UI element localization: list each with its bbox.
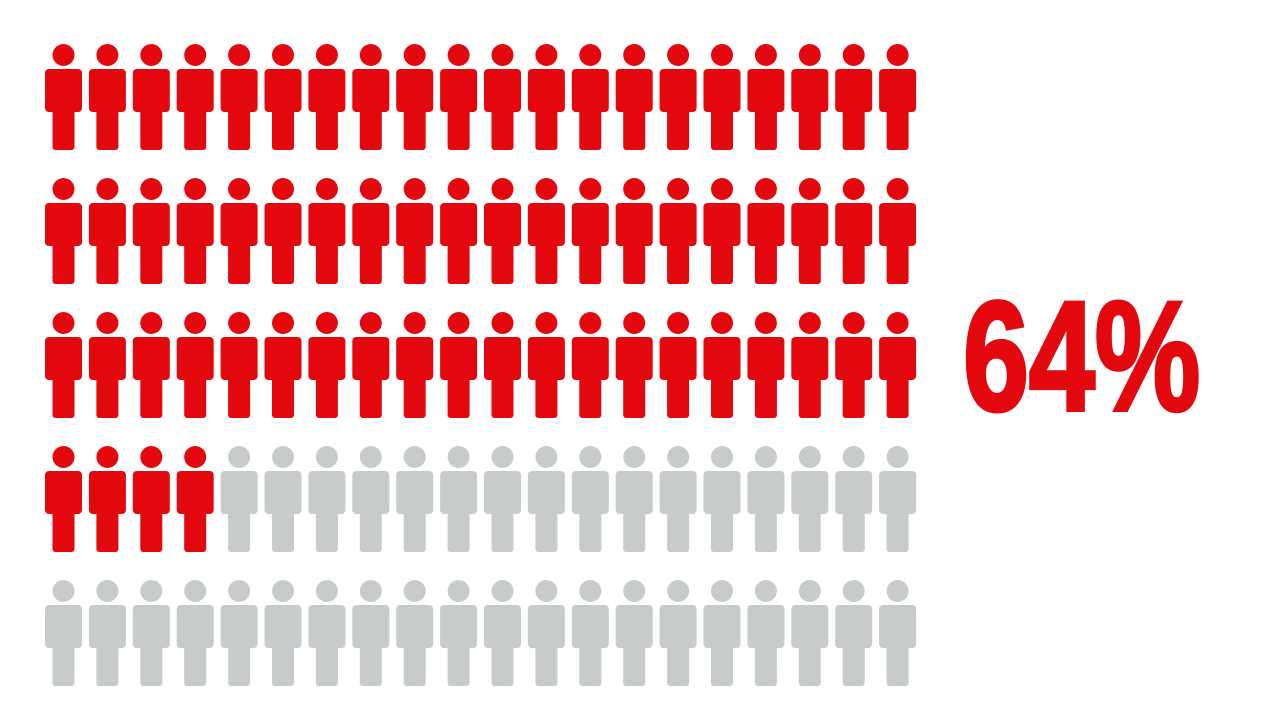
pictogram grid: 64 of 100 highlighted xyxy=(45,44,916,686)
row 1: 20 red figures xyxy=(45,44,916,150)
percentage label: 64% xyxy=(963,270,1200,444)
row 4: 4 red and 16 grey figures xyxy=(45,446,916,552)
row 3: 20 red figures xyxy=(45,312,916,418)
row 2: 20 red figures xyxy=(45,178,916,284)
row 5: 20 grey figures xyxy=(45,580,916,686)
